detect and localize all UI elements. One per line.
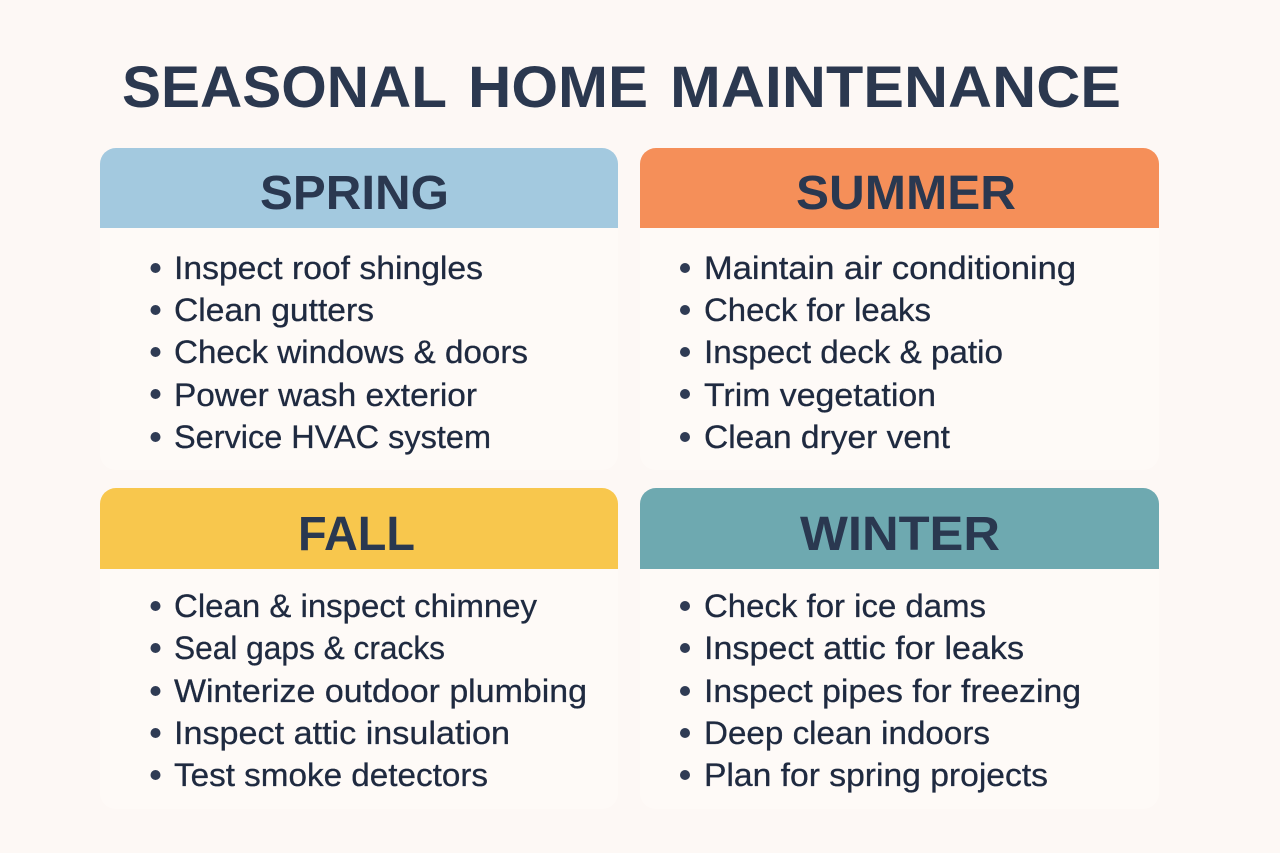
spring header band: [100, 148, 618, 228]
fall task list: Winterize outdoor plumbing: [174, 673, 587, 709]
spring task list: Check windows & doors: [174, 334, 528, 370]
panel: winter: [640, 488, 1159, 809]
summer task list: [680, 250, 1076, 455]
winter heading: WINTER: [800, 508, 1000, 561]
spring task list: [150, 250, 528, 455]
title: [122, 55, 1121, 120]
summer task list: Clean dryer vent: [704, 419, 950, 455]
panel: fall: [100, 488, 618, 809]
summer heading: SUMMER: [796, 167, 1016, 220]
title: HOME: [468, 55, 648, 120]
fall task list: Clean & inspect chimney: [174, 588, 537, 624]
spring task list: Inspect roof shingles: [174, 250, 483, 286]
panel: summer: [640, 148, 1159, 470]
winter task list: Check for ice dams: [704, 588, 986, 624]
spring heading: SPRING: [260, 167, 449, 220]
title: SEASONAL: [122, 55, 447, 120]
winter task list: Plan for spring projects: [704, 757, 1048, 793]
fall task list: Seal gaps & cracks: [174, 630, 445, 666]
winter task list: Inspect attic for leaks: [704, 630, 1024, 666]
spring task list: Power wash exterior: [174, 377, 477, 413]
summer header band: [640, 148, 1159, 228]
fall header band: [100, 488, 618, 569]
fall task list: Test smoke detectors: [174, 757, 488, 793]
summer task list: Maintain air conditioning: [704, 250, 1076, 286]
spring task list: Service HVAC system: [174, 419, 491, 455]
winter task list: [680, 588, 1081, 793]
fall task list: [150, 588, 587, 793]
winter header band: [640, 488, 1159, 569]
spring task list: Clean gutters: [174, 292, 374, 328]
summer task list: Trim vegetation: [704, 377, 936, 413]
panel: spring: [100, 148, 618, 470]
summer task list: Check for leaks: [704, 292, 931, 328]
title: MAINTENANCE: [670, 55, 1121, 120]
winter task list: Deep clean indoors: [704, 715, 990, 751]
summer task list: Inspect deck & patio: [704, 334, 1003, 370]
fall heading: FALL: [298, 508, 415, 561]
winter task list: Inspect pipes for freezing: [704, 673, 1081, 709]
fall task list: Inspect attic insulation: [174, 715, 510, 751]
